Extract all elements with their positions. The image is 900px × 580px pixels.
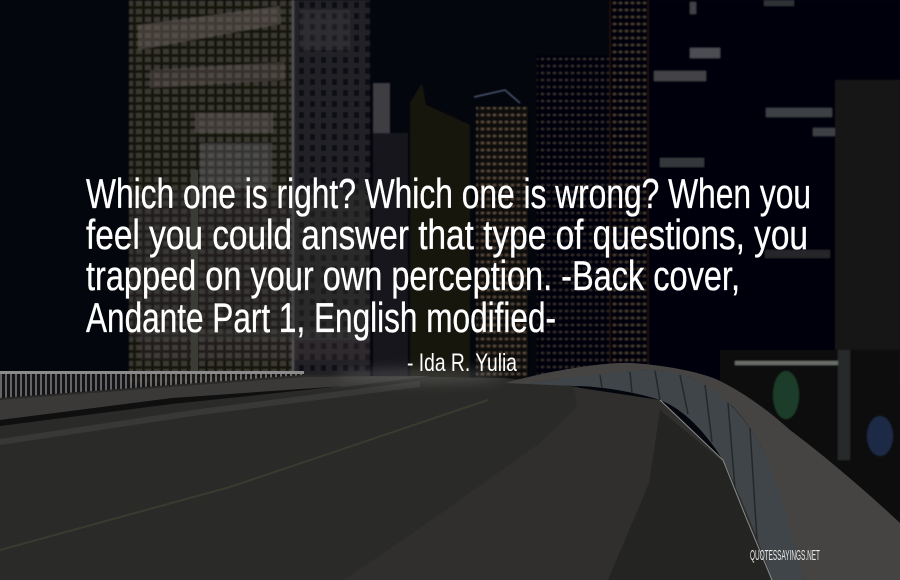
background: dark right towers xyxy=(650,0,900,385)
background: right bridge barrier xyxy=(505,363,900,580)
distant glow xyxy=(335,369,505,383)
quote line 4: Andante Part 1, English modified- xyxy=(86,294,556,341)
background: left pavement strip xyxy=(0,376,430,420)
quote text xyxy=(86,170,811,341)
background: road lane lines xyxy=(0,384,488,550)
background: lamp post xyxy=(191,170,198,385)
background: distant skyscrapers xyxy=(373,0,649,385)
background: left office tower xyxy=(129,0,370,385)
background: sidewalk shadow band xyxy=(608,410,772,580)
background: sidewalk xyxy=(344,387,780,580)
author attribution: - Ida R. Yulia xyxy=(407,349,517,377)
background: right roadside xyxy=(720,350,900,530)
background: left bridge railing xyxy=(0,371,304,398)
background: road surface xyxy=(0,375,578,580)
background: left kerb shadow xyxy=(0,386,344,426)
